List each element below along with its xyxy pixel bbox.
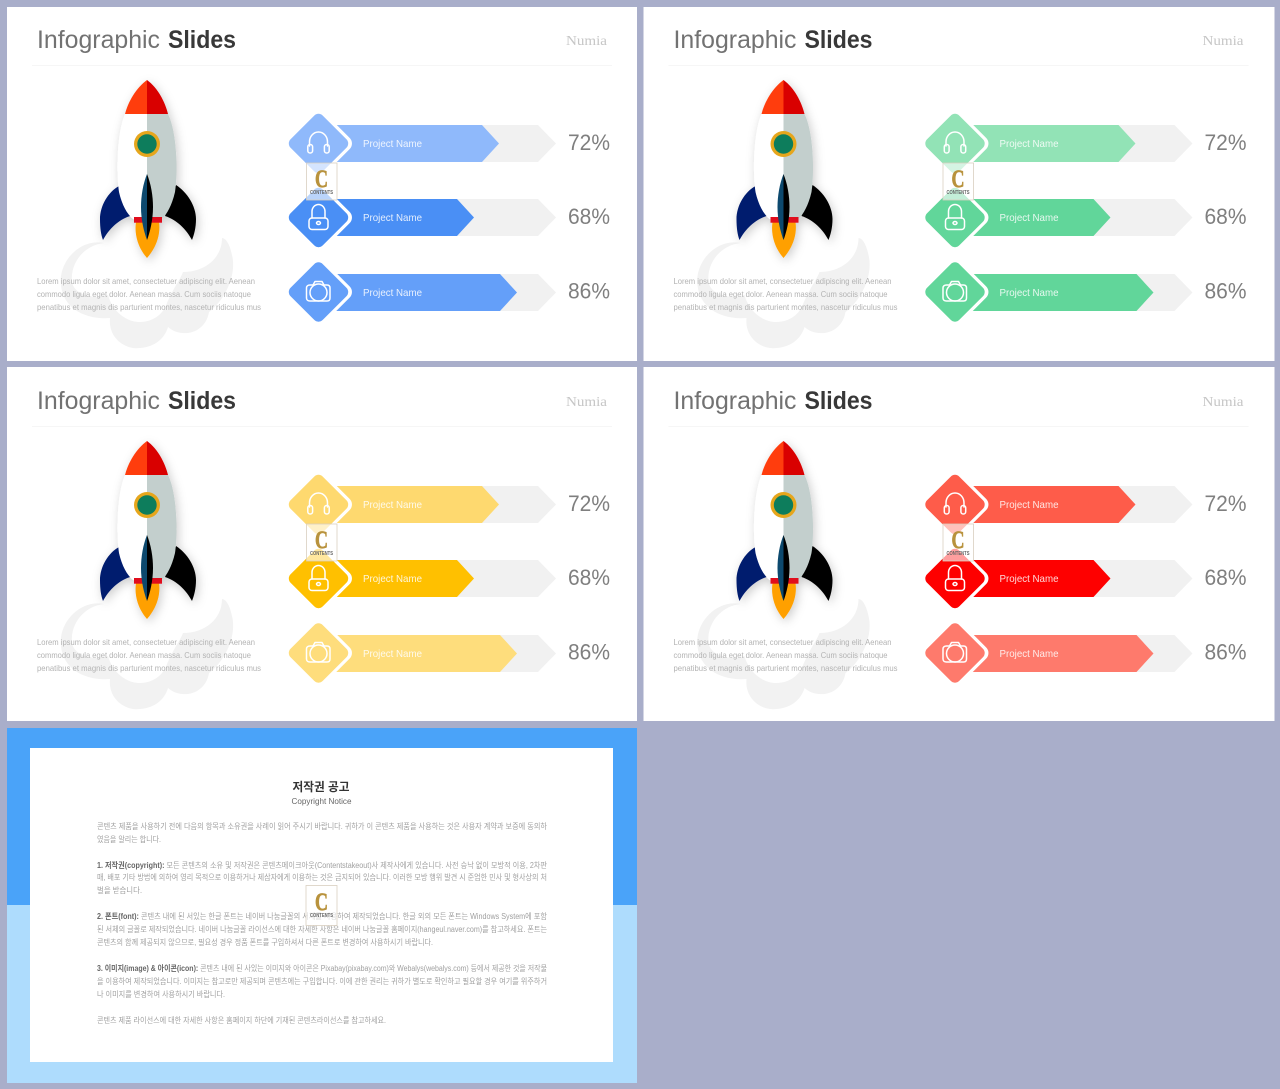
bar row: 86%: Project Name: [1000, 648, 1059, 660]
notice body text: 콘텐츠 제품 라이선스에 대한 자세한 사항은 홈페이지 하단에 기재된 콘텐츠라이선스를 참고하세요.: [97, 1015, 386, 1025]
text block: lorem: penatibus et magnis dis parturient montes, nascetur ridiculus mus: [674, 302, 898, 312]
text block: lorem: [37, 637, 261, 673]
text block: lorem: [674, 276, 898, 312]
text block: lorem: penatibus et magnis dis parturient montes, nascetur ridiculus mus: [674, 663, 898, 673]
notice body text: [97, 821, 548, 1025]
brand name: Numia: [566, 34, 608, 49]
watermark: CONTENTS: [310, 190, 334, 196]
notice body text: 벌을 받습니다.: [97, 885, 142, 895]
white sheet: [30, 748, 613, 1062]
blue upper band: [7, 728, 637, 905]
icon: smoke cloud: [697, 238, 870, 348]
bar row: 72%: Project Name: [363, 499, 422, 511]
title: [37, 387, 236, 415]
watermark: C: [952, 166, 964, 193]
bar row: 86%: Project Name: [363, 648, 422, 660]
notice body text: 매, 배포 기타 방법에 의하여 영리 목적으로 이용하거나 제삼자에게 이용하는 것은 금지되어 있습니다. 이러한 모방 행위 발견 시 준엄한 민사 및 형사상의 처: [97, 872, 547, 882]
panel: copyright notice: [7, 728, 637, 1083]
bar row: 86%: Project Name: [363, 287, 422, 299]
text block: lorem: penatibus et magnis dis parturient montes, nascetur ridiculus mus: [37, 302, 261, 312]
bar row: 86%: [282, 616, 610, 690]
watermark: C: [952, 527, 964, 554]
bar row: 72%: 72%: [568, 491, 610, 516]
text block: lorem: commodo ligula eget dolor. Aenean massa. Cum sociis natoque: [674, 650, 888, 660]
notice body text: 2. 폰트(font): 콘텐츠 내에 된 서있는 한글 폰트는 네이버 나눔글꼴의 서체를 사용하여 제작되었습니다. 한글 외의 모든 폰트는 Windows System에 포함: [97, 911, 548, 921]
bar row: 86%: [282, 255, 610, 329]
card background: [644, 7, 1274, 361]
watermark: C: [315, 889, 328, 916]
icon: rocket: [736, 80, 832, 258]
text block: lorem: Lorem ipsum dolor sit amet, consectetuer adipiscing elit. Aenean: [37, 276, 255, 286]
icon: smoke cloud: [697, 599, 870, 709]
icon: rocket: [100, 80, 196, 258]
text block: lorem: penatibus et magnis dis parturient montes, nascetur ridiculus mus: [37, 663, 261, 673]
watermark: CONTENTS: [946, 190, 970, 196]
bar row: 68%: Project Name: [1000, 212, 1059, 224]
bar row: 72%: 72%: [1204, 491, 1246, 516]
bar row: 86%: [918, 616, 1246, 690]
bar row: 72%: [918, 107, 1246, 180]
bar row: 86%: 86%: [1204, 640, 1246, 664]
bar row: 68%: Project Name: [1000, 573, 1059, 585]
bar row: 72%: 72%: [1204, 130, 1246, 155]
watermark: [306, 163, 337, 200]
notice body text: 콘텐츠의 함께 제공되지 않으므로, 필요성 경우 정품 폰트를 구입하셔서 다른 폰트로 변경하여 사용하시기 바랍니다.: [97, 937, 433, 947]
title: Slides: [804, 26, 872, 54]
text block: lorem: commodo ligula eget dolor. Aenean massa. Cum sociis natoque: [37, 289, 251, 299]
text block: lorem: [37, 276, 261, 312]
title: [674, 26, 872, 54]
panel: slide 2 green: [644, 7, 1274, 361]
notice body text: 1. 저작권(copyright): 모든 콘텐츠의 소유 및 저작권은 콘텐츠메이크아웃(Contentstakeout)사 제작사에게 있습니다. 사전 승낙 없이 모방적 이용, 2차판: [97, 860, 548, 870]
bar row: 72%: [282, 107, 610, 180]
bar row: 68%: 68%: [1204, 565, 1246, 590]
bar row: 72%: Project Name: [1000, 138, 1059, 150]
bar row: 68%: 68%: [568, 204, 610, 229]
bar row: 86%: 86%: [1204, 278, 1246, 304]
title: [37, 26, 236, 54]
bar row: 86%: Project Name: [1000, 287, 1059, 299]
icon: smoke cloud: [61, 238, 233, 348]
text block: lorem: Lorem ipsum dolor sit amet, consectetuer adipiscing elit. Aenean: [37, 637, 255, 647]
watermark: C: [315, 166, 328, 193]
bar row: 72%: [282, 468, 610, 541]
brand name: Numia: [566, 395, 608, 410]
card background: [7, 367, 637, 721]
title: Infographic: [37, 26, 160, 54]
icon: smoke cloud: [61, 599, 233, 709]
title: Infographic: [37, 387, 160, 415]
text block: lorem: Lorem ipsum dolor sit amet, consectetuer adipiscing elit. Aenean: [674, 276, 892, 286]
watermark: [943, 163, 974, 200]
bar row: 72%: Project Name: [1000, 499, 1059, 511]
bar row: 68%: [282, 181, 610, 254]
title: Slides: [168, 26, 236, 54]
title: Slides: [804, 387, 872, 415]
watermark: [306, 524, 337, 561]
bar row: 72%: [918, 468, 1246, 541]
notice heading: 저작권 공고: [292, 779, 350, 794]
title: Slides: [168, 387, 236, 415]
title: [674, 387, 872, 415]
bar row: 68%: Project Name: [363, 212, 422, 224]
icon: rocket: [736, 441, 832, 619]
title: Infographic: [674, 387, 796, 415]
brand name: Numia: [1202, 34, 1244, 49]
bar row: 68%: 68%: [568, 565, 610, 590]
bar row: 86%: 86%: [568, 640, 610, 664]
bar row: 72%: Project Name: [363, 138, 422, 150]
bar row: 68%: [282, 542, 610, 615]
notice body text: 콘텐츠 제품을 사용하기 전에 다음의 항목과 소유권을 사례이 읽어 주시기 바랍니다. 귀하가 이 콘텐츠 제품을 사용하는 것은 사용자 계약과 보증에 동의하: [97, 821, 548, 831]
notice body text: 된 서체의 글꼴로 제작되었습니다. 네이버 나눔글꼴 라이선스에 대한 자세한 사항은 네이버 나눔글꼴 홈페이지(hangeul.naver.com)를 참고하세요. 폰트는: [97, 924, 547, 934]
panel: slide 1 blue: [7, 7, 637, 361]
title: Infographic: [674, 26, 796, 54]
notice body text: 였음을 알리는 합니다.: [97, 834, 161, 844]
bar row: 86%: [918, 255, 1246, 329]
brand name: Numia: [1202, 395, 1244, 410]
bar row: 72%: 72%: [568, 130, 610, 155]
watermark: C: [315, 527, 328, 554]
text block: lorem: Lorem ipsum dolor sit amet, consectetuer adipiscing elit. Aenean: [674, 637, 892, 647]
notice body text: 나 이미지를 변경하여 사용하시기 바랍니다.: [97, 989, 225, 999]
watermark: [306, 886, 337, 926]
bar row: 68%: [918, 181, 1246, 254]
card background: [7, 7, 637, 361]
panel: slide 4 red: [644, 367, 1274, 721]
watermark: CONTENTS: [310, 913, 334, 919]
text block: lorem: [674, 637, 898, 673]
notice body text: 3. 이미지(image) & 아이콘(icon): 콘텐츠 내에 된 사있는 이미지와 아이콘은 Pixabay(pixabay.com)와 Webalys(webalys.com) 등에서 제공한 것을 저작물: [97, 963, 547, 973]
watermark: CONTENTS: [310, 551, 334, 557]
bar row: 68%: 68%: [1204, 204, 1246, 229]
text block: lorem: commodo ligula eget dolor. Aenean massa. Cum sociis natoque: [674, 289, 888, 299]
text block: lorem: commodo ligula eget dolor. Aenean massa. Cum sociis natoque: [37, 650, 251, 660]
bar row: 68%: Project Name: [363, 573, 422, 585]
watermark: CONTENTS: [946, 551, 970, 557]
bar row: 86%: 86%: [568, 278, 610, 304]
notice body text: 을 이용하여 제작되었습니다. 이미지는 참고로만 제공되며 콘텐츠에는 구입합니다. 이에 관한 권리는 귀하가 별도로 확인하고 필요할 경우 여기를 위주하거: [97, 976, 547, 986]
panel: slide 3 yellow: [7, 367, 637, 721]
bar row: 68%: [918, 542, 1246, 615]
icon: rocket: [100, 441, 196, 619]
light blue lower band: [7, 905, 637, 1083]
card background: [644, 367, 1274, 721]
notice subheading: Copyright Notice: [292, 796, 352, 806]
watermark: [943, 524, 974, 561]
